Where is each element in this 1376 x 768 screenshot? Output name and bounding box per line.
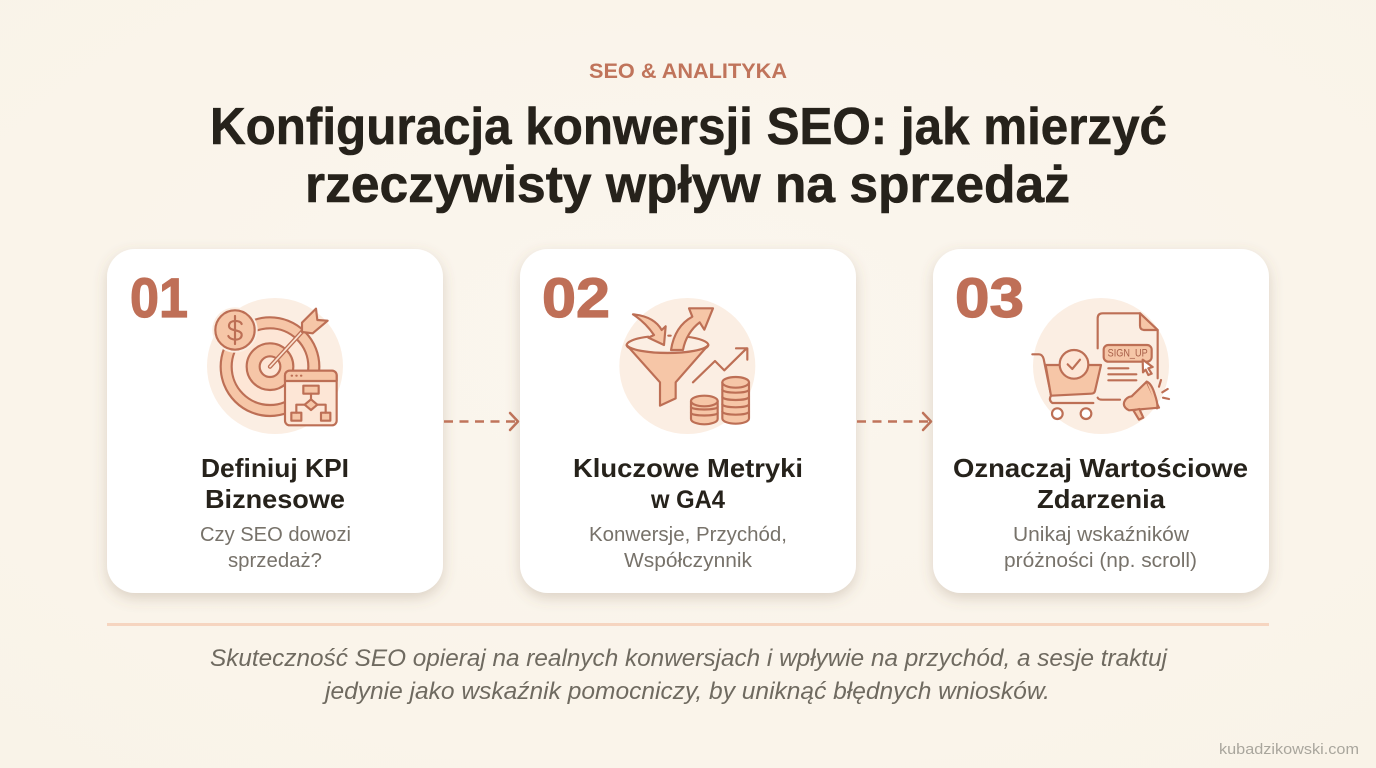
step description: sprzedaż? [228, 550, 322, 572]
step number 03: 03 [955, 266, 1024, 329]
eyebrow label: SEO & ANALITYKA [589, 60, 787, 83]
step description [589, 524, 787, 572]
step description: Unikaj wskaźników [1013, 524, 1190, 546]
icon: funnel with arrows and coins [619, 298, 755, 434]
icon: target with dollar coin and flowchart [207, 298, 343, 434]
arrow: step 2 to 3 [857, 413, 931, 430]
step heading: Biznesowe [205, 484, 345, 514]
title: Konfiguracja konwersji SEO: jak mierzyć [210, 98, 1167, 156]
arrow: step 1 to 2 [444, 413, 518, 430]
panel: step 1 [107, 249, 443, 593]
step heading: Oznaczaj Wartościowe [953, 453, 1248, 483]
step description [200, 524, 351, 572]
step heading: Definiuj KPI [201, 453, 349, 483]
icon: cart, document and megaphone [1032, 298, 1169, 434]
watermark: kubadzikowski.com [1219, 741, 1359, 758]
summary text: Skuteczność SEO opieraj na realnych konwersjach i wpływie na przychód, a sesje traktuj [210, 645, 1168, 672]
step number 01: 01 [130, 266, 188, 329]
step number 02: 02 [542, 266, 610, 329]
step description: próżności (np. scroll) [1004, 550, 1197, 572]
step description: Współczynnik [624, 550, 753, 572]
step description: Czy SEO dowozi [200, 524, 351, 546]
panel: step 2 [520, 249, 856, 593]
summary text: jedynie jako wskaźnik pomocniczy, by uniknąć błędnych wniosków. [322, 678, 1050, 705]
step heading: w GA4 [650, 486, 725, 514]
step heading: Zdarzenia [1037, 484, 1166, 514]
panel: step 3 [933, 249, 1269, 593]
step description [1004, 524, 1197, 572]
step heading [573, 453, 803, 514]
title [210, 98, 1167, 214]
step heading [201, 453, 349, 514]
step description: Konwersje, Przychód, [589, 524, 787, 546]
title: rzeczywisty wpływ na sprzedaż [305, 156, 1070, 214]
icon: cart, document and megaphone: SIGN_UP [1108, 348, 1148, 360]
step heading [953, 453, 1248, 514]
summary text [210, 645, 1168, 705]
step heading: Kluczowe Metryki [573, 453, 803, 483]
